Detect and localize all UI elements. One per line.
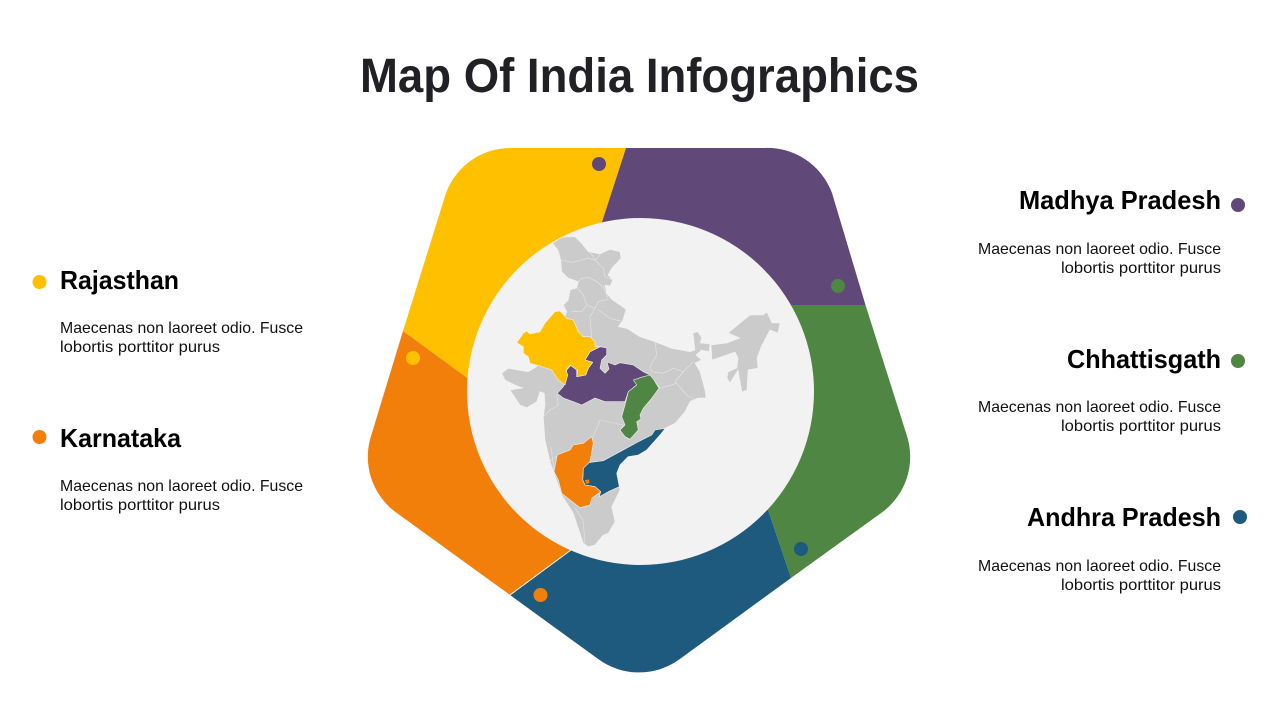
pentagon diagram [368, 148, 910, 672]
segment: blue [510, 392, 791, 672]
map: Karnataka [554, 437, 601, 508]
dot [1231, 354, 1245, 368]
dot [1231, 198, 1245, 212]
heading: Karnataka [60, 423, 182, 453]
legend: Karnataka [32, 423, 303, 514]
description: lobortis porttitor purus [1061, 260, 1221, 277]
legend: Rajasthan [32, 265, 303, 356]
description: lobortis porttitor purus [60, 497, 220, 514]
map: Andhra Pradesh [583, 428, 665, 497]
dot [32, 275, 46, 289]
legend: Chhattisgath [978, 344, 1245, 435]
description: Maecenas non laoreet odio. Fusce [978, 558, 1221, 575]
description: Maecenas non laoreet odio. Fusce [978, 241, 1221, 258]
marker: blue on green [794, 542, 808, 556]
map: gray north-east [711, 312, 780, 392]
map: Chhattisgarh [620, 375, 659, 439]
heading: Rajasthan [60, 265, 179, 295]
title: Map Of India Infographics [360, 50, 919, 103]
map: Karnataka enclave [585, 480, 590, 484]
description: lobortis porttitor purus [1061, 418, 1221, 435]
marker: purple on yellow [592, 157, 606, 171]
map of India [502, 237, 780, 547]
map: Rajasthan [517, 311, 600, 385]
heading: Andhra Pradesh [1027, 502, 1221, 532]
dot [32, 430, 46, 444]
map: internal state borders [543, 252, 695, 543]
legend: Andhra Pradesh [978, 502, 1247, 594]
description: Maecenas non laoreet odio. Fusce [978, 399, 1221, 416]
marker: orange on blue [534, 588, 548, 602]
segment: green [640, 305, 910, 578]
heading: Madhya Pradesh [1019, 185, 1221, 215]
description: lobortis porttitor purus [1061, 577, 1221, 594]
segment: yellow [403, 148, 640, 392]
description: lobortis porttitor purus [60, 339, 220, 356]
center circle [467, 218, 814, 565]
legend: Madhya Pradesh [978, 185, 1245, 277]
segment: purple [602, 148, 866, 392]
dot [1233, 510, 1247, 524]
heading: Chhattisgath [1067, 344, 1221, 374]
description: Maecenas non laoreet odio. Fusce [60, 320, 303, 337]
marker: green on purple [831, 279, 845, 293]
description: Maecenas non laoreet odio. Fusce [60, 478, 303, 495]
divider between orange and blue [510, 550, 571, 595]
marker: yellow on orange [406, 351, 420, 365]
segment: orange [368, 331, 640, 595]
map: Madhya Pradesh [557, 347, 654, 405]
map: gray mainland [502, 237, 710, 547]
